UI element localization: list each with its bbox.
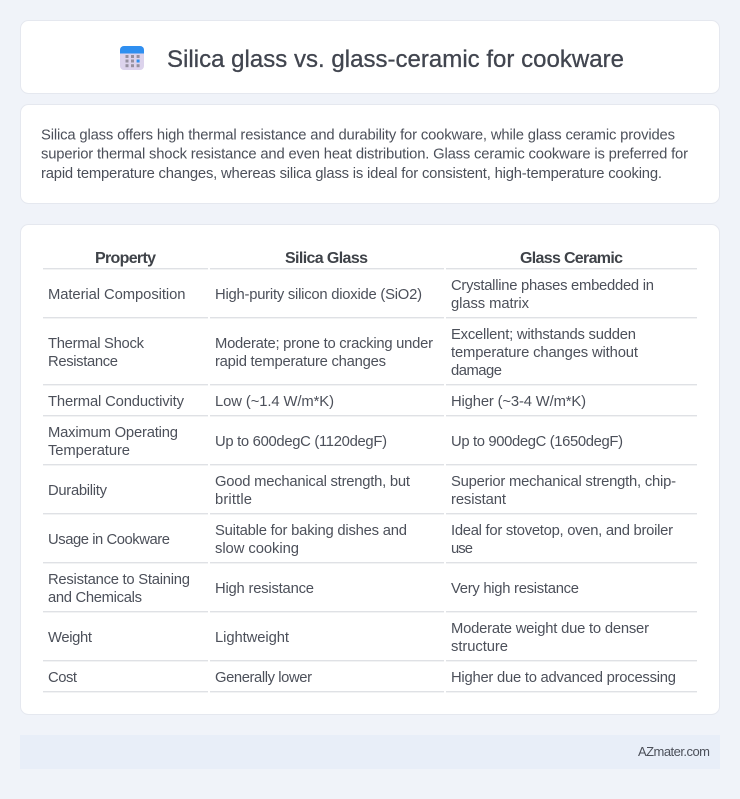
row: thermal shock resistance: Excellent; withstands sudden <box>451 327 636 343</box>
table header: Silica Glass <box>285 250 368 267</box>
intro text <box>41 128 688 182</box>
footer credit: AZmater.com <box>638 744 710 759</box>
row: resistance to staining and chemicals: and Chemicals <box>48 590 142 606</box>
row: durability: Good mechanical strength, but <box>215 474 410 490</box>
intro text: rapid temperature changes, whereas silica glass is ideal for consistent, high-temperature cooking. <box>41 166 662 182</box>
table header: Property <box>95 250 156 267</box>
row: durability <box>48 474 676 508</box>
row: cost: Higher due to advanced processing <box>451 670 676 686</box>
row: material composition: glass matrix <box>451 296 530 312</box>
row: thermal conductivity: Higher (~3-4 W/m*K) <box>451 394 586 410</box>
row: usage in cookware: slow cooking <box>215 541 299 557</box>
row: thermal conductivity <box>48 394 586 410</box>
row: maximum operating temperature: Up to 900degC (1650degF) <box>451 434 623 450</box>
row: maximum operating temperature: Temperature <box>48 443 130 459</box>
row: usage in cookware: Ideal for stovetop, oven, and broiler <box>451 523 673 539</box>
table header: Glass Ceramic <box>520 250 623 267</box>
row: maximum operating temperature: Maximum Operating <box>48 425 178 441</box>
row: usage in cookware <box>48 523 673 557</box>
panel: title card <box>20 20 720 94</box>
panel: comparison table <box>20 224 720 714</box>
row: thermal shock resistance: temperature changes without <box>451 345 638 361</box>
footer <box>20 735 720 769</box>
row: material composition: Crystalline phases embedded in <box>451 278 654 294</box>
row: weight: Lightweight <box>215 630 289 646</box>
row: cost: Cost <box>48 670 77 686</box>
row: resistance to staining and chemicals: Very high resistance <box>451 581 579 597</box>
row: weight <box>48 621 649 655</box>
row: thermal shock resistance <box>48 327 638 379</box>
intro text: Silica glass offers high thermal resistance and durability for cookware, while glass ceramic provides <box>41 128 675 144</box>
row: resistance to staining and chemicals: Resistance to Staining <box>48 572 190 588</box>
row: durability: Superior mechanical strength, chip- <box>451 474 676 490</box>
title: Silica glass vs. glass-ceramic for cookware <box>167 46 624 73</box>
row: thermal shock resistance: rapid temperature changes <box>215 354 386 370</box>
row: maximum operating temperature <box>48 425 623 459</box>
panel: intro <box>20 104 720 204</box>
row: material composition: Material Composition <box>48 287 186 303</box>
row: cost: Generally lower <box>215 670 312 686</box>
row: cost <box>48 670 676 686</box>
row: material composition: High-purity silicon dioxide (SiO2) <box>215 287 422 303</box>
row: resistance to staining and chemicals: High resistance <box>215 581 314 597</box>
row: material composition <box>48 278 654 312</box>
row: maximum operating temperature: Up to 600degC (1120degF) <box>215 434 387 450</box>
table header <box>95 250 623 267</box>
row: thermal conductivity: Low (~1.4 W/m*K) <box>215 394 334 410</box>
row: weight: structure <box>451 639 508 655</box>
row: thermal conductivity: Thermal Conductivity <box>48 394 185 410</box>
row: durability: Durability <box>48 483 108 499</box>
row: usage in cookware: use <box>451 541 473 557</box>
row: weight: Weight <box>48 630 92 646</box>
row: thermal shock resistance: Moderate; prone to cracking under <box>215 336 433 352</box>
row: resistance to staining and chemicals <box>48 572 579 606</box>
row: usage in cookware: Suitable for baking dishes and <box>215 523 407 539</box>
icon: calendar <box>120 46 144 70</box>
row: usage in cookware: Usage in Cookware <box>48 532 170 548</box>
row: thermal shock resistance: Thermal Shock <box>48 336 145 352</box>
row: thermal shock resistance: damage <box>451 363 502 379</box>
row: durability: resistant <box>451 492 506 508</box>
row: durability: brittle <box>215 492 252 508</box>
row: weight: Moderate weight due to denser <box>451 621 649 637</box>
row: thermal shock resistance: Resistance <box>48 354 118 370</box>
intro text: superior thermal shock resistance and even heat distribution. Glass ceramic cookware is preferred for <box>41 146 688 162</box>
